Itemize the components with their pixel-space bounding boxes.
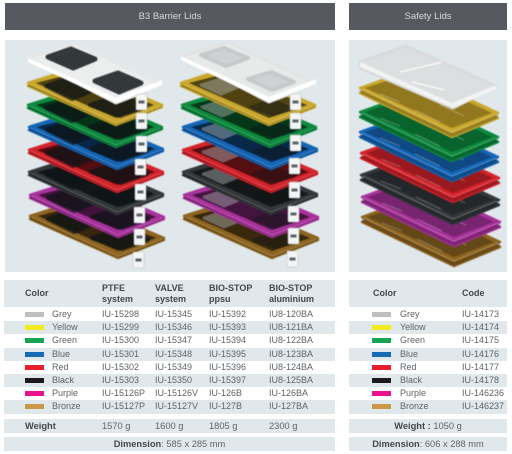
row: Bronze (349, 400, 507, 414)
row: Black: Black (400, 375, 422, 385)
row: Bronze: IU-15127P (102, 401, 145, 411)
row: Weight: 1600 g (155, 421, 183, 431)
row: Bronze: Bronze (52, 401, 81, 411)
table header: safety lids: Color (373, 288, 396, 298)
row: Dimension (4, 437, 335, 451)
row: Weight: 2300 g (269, 421, 297, 431)
row: Yellow: IU-15346 (155, 322, 192, 332)
table header: safety lids (349, 280, 507, 307)
row: Green (25, 335, 313, 345)
row: Yellow (4, 321, 335, 334)
row: Green: IU-15300 (102, 335, 139, 345)
row: Purple: IU-15126P (102, 388, 145, 398)
white top lid with grey filters (181, 42, 316, 102)
row: Grey: IU-15298 (102, 309, 139, 319)
table header: barrier lids (4, 280, 335, 307)
row: Bronze: IU-15127V (155, 401, 198, 411)
row: Purple: IU-126BA (269, 388, 308, 398)
row: Green: IU8-122BA (269, 335, 313, 345)
row: Bronze: IU-146237 (462, 401, 504, 411)
row: Green: IU-14175 (462, 335, 499, 345)
row: Dimension: Dimension: 585 x 285 mm (114, 439, 225, 449)
lid stack: PTFE system (28, 43, 164, 268)
row: Black: Black (52, 375, 74, 385)
table header: barrier lids: BIO-STOP (209, 283, 252, 293)
table header: barrier lids: system (102, 294, 133, 304)
row: Purple: IU-15126V (155, 388, 198, 398)
panel: barrier lids image background (5, 40, 335, 272)
row: Black (349, 374, 507, 387)
row: Red: IU-15396 (209, 362, 246, 372)
heading: B3 Barrier Lids: B3 Barrier Lids (139, 11, 201, 22)
row: Red (25, 362, 313, 372)
row: Dimension: Dimension: 606 x 288 mm (372, 439, 484, 449)
table header: barrier lids: BIO-STOP (269, 283, 312, 293)
row: Blue (349, 348, 507, 361)
row: Weight: 1805 g (209, 421, 237, 431)
row: Green: IU-15394 (209, 335, 246, 345)
row: Bronze: IU-127BA (269, 401, 308, 411)
row: Red (372, 362, 499, 372)
row: Green: Green (400, 335, 425, 345)
heading: Safety Lids (349, 3, 507, 30)
table header: barrier lids: PTFE (102, 283, 125, 293)
row: Blue: IU-14176 (462, 349, 499, 359)
row: Purple: Purple (400, 388, 426, 398)
row: Blue: IU-15348 (155, 349, 192, 359)
row: Blue (4, 348, 335, 361)
row: Purple: IU-126B (209, 388, 242, 398)
row: Grey: Grey (400, 309, 420, 319)
row: Black (4, 374, 335, 387)
table header: safety lids: Code (462, 288, 484, 298)
row: Green: IU-15347 (155, 335, 192, 345)
table header: barrier lids: ppsu (209, 294, 230, 304)
row: Blue: Blue (52, 349, 70, 359)
row: Red: IU8-124BA (269, 362, 313, 372)
row: Yellow: IU-15393 (209, 322, 246, 332)
lid stack: VALVE / BIO-STOP system (181, 42, 318, 267)
table header: barrier lids: Color (25, 288, 48, 298)
row: Bronze (4, 400, 335, 414)
row: Dimension (349, 437, 507, 451)
row: Red: Red (52, 362, 69, 372)
row: Purple: Purple (52, 388, 78, 398)
row: Yellow: IU-15299 (102, 322, 139, 332)
row: Grey (372, 309, 499, 319)
heading: B3 Barrier Lids (5, 3, 335, 30)
row: Black: IU-14178 (462, 375, 499, 385)
row: Grey: IU-14173 (462, 309, 499, 319)
row: Purple (372, 388, 504, 398)
row: Bronze: Bronze (400, 401, 429, 411)
white top lid with dark filters (28, 43, 162, 103)
row: Black: IU-15303 (102, 375, 139, 385)
row: Weight: Weight (25, 421, 56, 431)
row: Grey: IU8-120BA (269, 309, 313, 319)
table header: barrier lids: VALVE (155, 283, 184, 293)
row: Red: IU-15302 (102, 362, 139, 372)
row: Weight: 1570 g (102, 421, 130, 431)
row: Green (372, 335, 499, 345)
row: Yellow (349, 321, 507, 334)
row: Blue: IU8-123BA (269, 349, 313, 359)
row: Weight: Weight : 1050 g (394, 421, 462, 431)
row: Blue: IU-15395 (209, 349, 246, 359)
row: Black: IU-15350 (155, 375, 192, 385)
row: Yellow: IU8-121BA (269, 322, 313, 332)
row: Grey (25, 309, 313, 319)
table header: barrier lids: system (155, 294, 186, 304)
row: Black: IU8-125BA (269, 375, 313, 385)
row: Weight (349, 419, 507, 433)
row: Purple (25, 388, 308, 398)
row: Blue: IU-15301 (102, 349, 139, 359)
row: Weight (4, 419, 335, 433)
row: Bronze: IU-127B (209, 401, 242, 411)
heading: Safety Lids: Safety Lids (404, 11, 452, 22)
row: Black: IU-15397 (209, 375, 246, 385)
row: Blue: Blue (400, 349, 418, 359)
table header: barrier lids: aluminium (269, 294, 314, 304)
row: Red: IU-15349 (155, 362, 192, 372)
row: Yellow: Yellow (400, 322, 426, 332)
row: Yellow: Yellow (52, 322, 78, 332)
row: Grey: Grey (52, 309, 72, 319)
row: Red: Red (400, 362, 417, 372)
row: Green: Green (52, 335, 77, 345)
white top safety lid (360, 46, 496, 108)
row: Purple: IU-146236 (462, 388, 504, 398)
row: Red: IU-14177 (462, 362, 499, 372)
row: Grey: IU-15392 (209, 309, 246, 319)
lid stack: Safety lids (360, 46, 500, 266)
row: Yellow: IU-14174 (462, 322, 499, 332)
panel: safety lids image background (349, 40, 507, 272)
row: Grey: IU-15345 (155, 309, 192, 319)
